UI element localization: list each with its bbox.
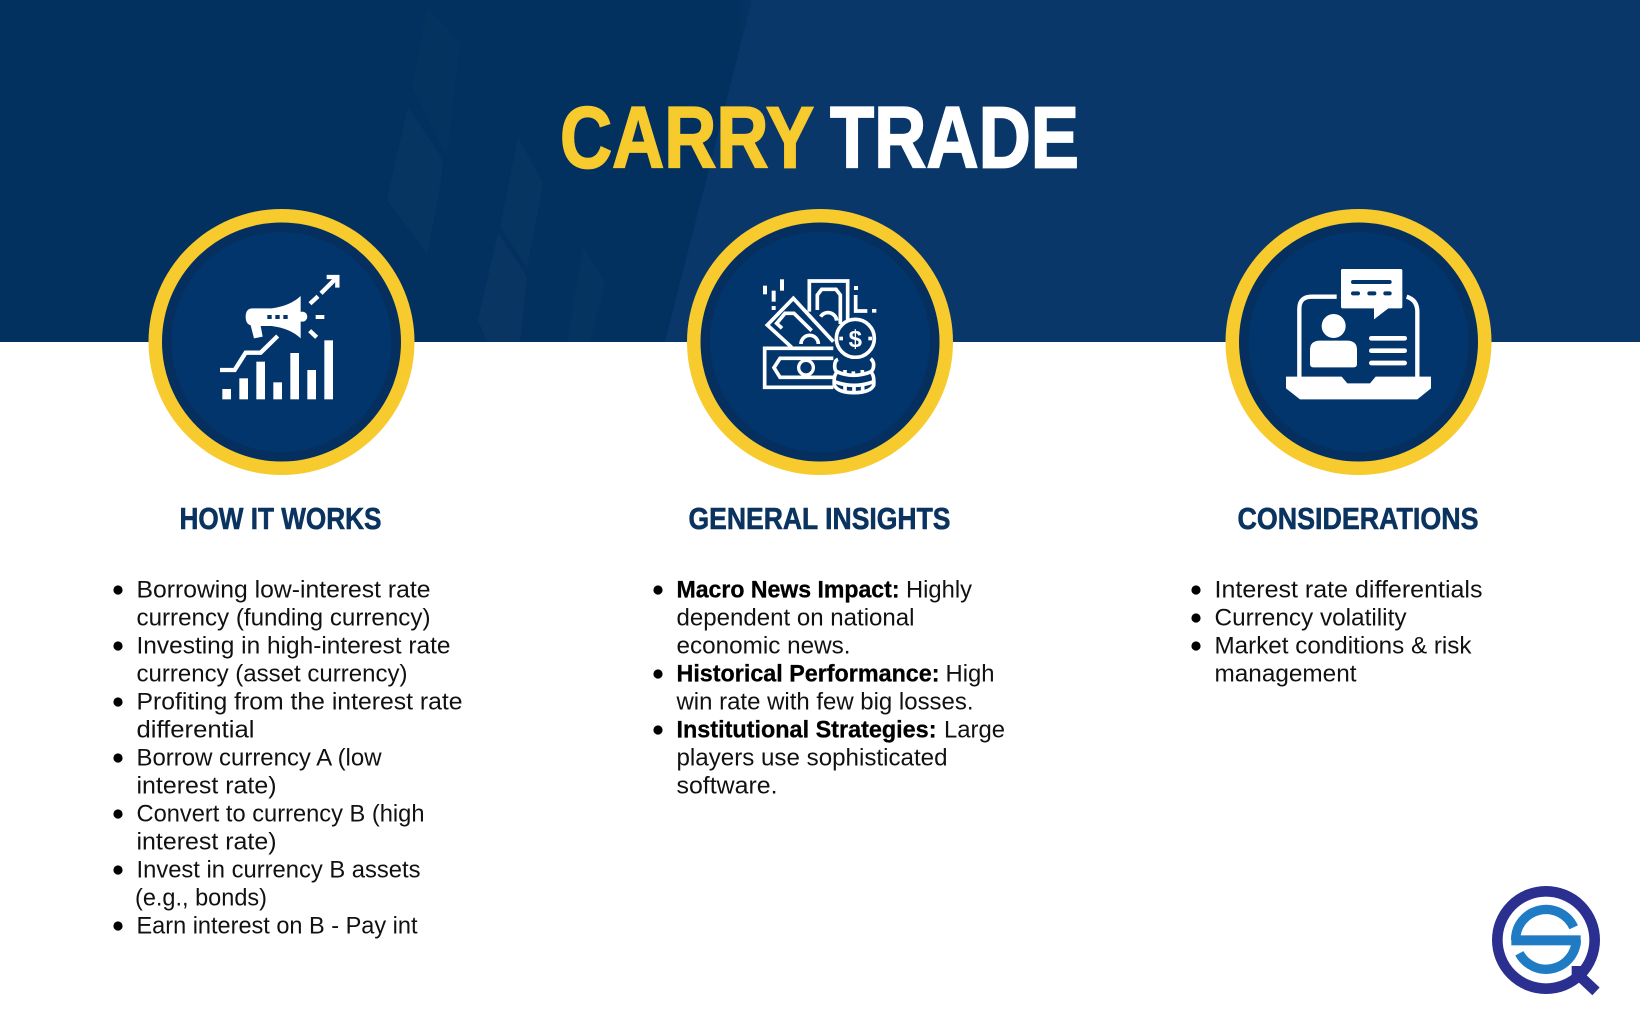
- list: considerations: Interest rate differentials: [1214, 576, 1482, 604]
- list: general insights: Historical Performance:: [676, 660, 940, 688]
- title: TRADE: [830, 90, 1079, 186]
- list: how it works: Invest in currency B assets: [136, 856, 420, 884]
- list: general insights: win rate with few big losses.: [676, 688, 974, 716]
- icon: laptop with person and chat bubble: [1286, 269, 1431, 399]
- list: general insights: players use sophisticated: [676, 744, 948, 772]
- list: how it works: Profiting from the interest rate: [136, 688, 462, 716]
- title: CARRY: [560, 90, 814, 186]
- list: general insights: High: [946, 660, 994, 688]
- list: how it works: [113, 576, 463, 940]
- badge: how it works: [148, 209, 414, 475]
- list: how it works: Borrow currency A (low: [136, 744, 382, 772]
- heading: how it works: HOW IT WORKS: [180, 501, 382, 536]
- panel: general insights: [653, 209, 1005, 800]
- list: general insights: Large: [944, 716, 1005, 744]
- list: how it works: interest rate): [136, 772, 276, 800]
- badge: considerations: [1226, 209, 1492, 475]
- badge: general insights: [687, 209, 953, 475]
- panel: considerations: [1191, 209, 1492, 688]
- list: how it works: currency (asset currency): [136, 660, 408, 688]
- list: how it works: interest rate): [136, 828, 276, 856]
- list: general insights: [653, 576, 1005, 800]
- list: considerations: Market conditions & risk: [1214, 632, 1472, 660]
- list: general insights: software.: [676, 772, 778, 800]
- list: how it works: (e.g., bonds): [135, 884, 267, 912]
- list: how it works: Investing in high-interest rate: [136, 632, 450, 660]
- list: considerations: management: [1214, 660, 1357, 688]
- list: how it works: currency (funding currency): [136, 604, 430, 632]
- logo: magnifier with S: [1497, 891, 1596, 991]
- list: general insights: dependent on national: [676, 604, 914, 632]
- list: general insights: Highly: [906, 576, 973, 604]
- heading: considerations: CONSIDERATIONS: [1238, 501, 1478, 536]
- list: considerations: Currency volatility: [1214, 604, 1407, 632]
- panel: how it works: [113, 209, 463, 940]
- list: how it works: Convert to currency B (high: [136, 800, 424, 828]
- icon: megaphone and rising bar chart: [220, 277, 337, 399]
- title: [560, 90, 1079, 186]
- list: general insights: economic news.: [676, 632, 850, 660]
- list: how it works: differential: [136, 716, 254, 744]
- list: how it works: Earn interest on B - Pay int: [136, 912, 418, 940]
- header band: [0, 0, 1640, 342]
- list: general insights: Macro News Impact:: [676, 576, 900, 604]
- icon: banknotes and coins: $: [849, 326, 862, 353]
- heading: general insights: GENERAL INSIGHTS: [688, 501, 950, 536]
- list: general insights: Institutional Strategies:: [676, 716, 936, 744]
- icon: banknotes and coins: [763, 279, 876, 393]
- list: how it works: Borrowing low-interest rate: [136, 576, 430, 604]
- list: considerations: [1191, 576, 1482, 688]
